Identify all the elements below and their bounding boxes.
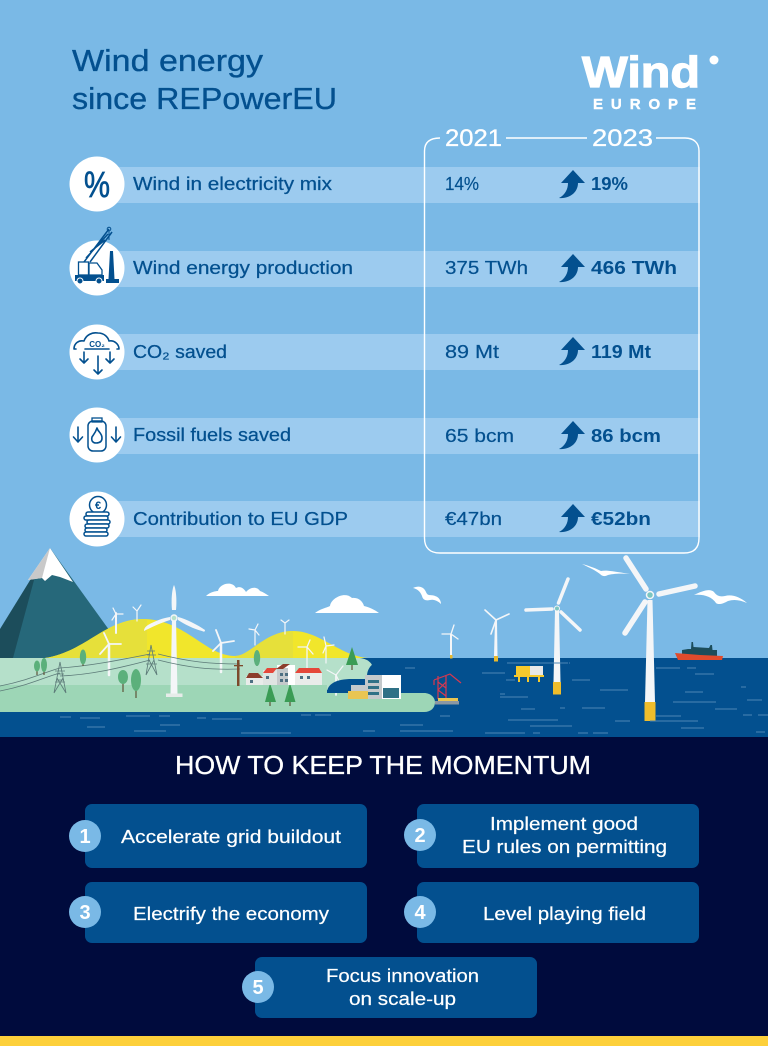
row: Contribution to EU GDP: Contribution to EU GDP <box>133 509 348 529</box>
sea ripples <box>60 663 768 733</box>
icon: gas cylinder with flame and arrows <box>74 418 120 451</box>
row: Fossil fuels saved: Fossil fuels saved <box>133 425 291 445</box>
action 3: 3 <box>79 902 91 924</box>
distant offshore turbine 1 <box>442 625 458 658</box>
action 4: 4 <box>414 902 426 924</box>
birds <box>413 564 747 604</box>
row: Wind in electricity mix <box>70 156 628 212</box>
row: Wind in electricity mix: 14% <box>445 174 479 194</box>
action 5: 5 <box>252 977 264 999</box>
row: Wind energy production <box>70 227 677 296</box>
icon: cloud with CO2 and down arrows <box>74 333 119 374</box>
action 2: 2 <box>414 825 426 847</box>
sea <box>0 658 768 737</box>
row: CO2 saved: 89 Mt <box>445 342 499 362</box>
heading: HOW TO KEEP THE MOMENTUM <box>175 750 591 780</box>
row: Wind in electricity mix: Wind in electricity mix <box>133 174 332 194</box>
action 5: Focus innovation <box>326 966 479 986</box>
action 3: Electrify the economy <box>133 904 329 924</box>
row: Contribution to EU GDP: €47bn <box>445 509 502 529</box>
action 5: on scale-up <box>349 989 456 1009</box>
illustration: landscape with wind turbines <box>0 548 768 737</box>
offshore turbine 3 <box>526 579 580 694</box>
action 1 <box>69 804 367 868</box>
action 5 <box>242 957 537 1018</box>
action 4 <box>404 882 699 943</box>
mountain <box>0 548 125 658</box>
trees <box>34 647 358 706</box>
action 4: Level playing field <box>483 904 646 924</box>
title: since REPowerEU <box>72 81 337 116</box>
title: Wind energy <box>72 43 264 78</box>
panel: data rows <box>70 125 700 553</box>
icon: cloud with CO2 and down arrows: CO₂ <box>89 340 105 349</box>
offshore crane ship <box>434 674 461 704</box>
comparison frame with year headers: 2021 <box>445 125 502 152</box>
logo: WindEurope <box>582 48 718 113</box>
icon: euro coin and stack <box>84 496 110 536</box>
action 2: EU rules on permitting <box>462 837 667 857</box>
row: CO2 saved: CO₂ saved <box>133 342 227 362</box>
action 2: Implement good <box>490 814 638 834</box>
title <box>72 43 337 116</box>
icon: euro coin and stack: € <box>95 500 101 512</box>
action 2 <box>404 804 699 868</box>
red ship <box>675 642 723 660</box>
row: Fossil fuels saved: 86 bcm <box>591 426 661 446</box>
row: Wind energy production: 375 TWh <box>445 258 528 278</box>
action 1: 1 <box>79 826 91 848</box>
row band: production <box>95 251 700 287</box>
hills <box>45 619 368 658</box>
row band: electricity mix <box>95 167 700 203</box>
row: CO2 saved <box>70 324 651 380</box>
row: Wind energy production: 466 TWh <box>591 258 677 278</box>
comparison frame with year headers <box>424 125 699 553</box>
row: Wind in electricity mix: % <box>84 164 110 205</box>
footer bar <box>0 1036 768 1046</box>
village houses <box>246 664 322 685</box>
row: Wind energy production: Wind energy production <box>133 258 353 278</box>
offshore turbine 4 <box>625 558 695 721</box>
row band: CO2 <box>95 334 700 370</box>
main land turbine <box>144 585 205 697</box>
land <box>0 658 435 712</box>
distant offshore turbine 2 <box>485 610 509 662</box>
logo: WindEurope: Wind <box>582 48 700 97</box>
row band: fossil fuels <box>95 418 700 454</box>
panel: how to keep the momentum <box>0 737 768 1036</box>
action 3 <box>69 882 367 943</box>
utility pole <box>234 660 243 686</box>
row: Fossil fuels saved: 65 bcm <box>445 426 514 446</box>
row: CO2 saved: 119 Mt <box>591 342 651 362</box>
row: Wind in electricity mix: 19% <box>591 174 628 194</box>
comparison frame with year headers: 2023 <box>592 125 653 152</box>
factory building <box>327 658 401 699</box>
offshore platform <box>514 666 544 682</box>
logo: WindEurope: EUROPE <box>593 96 696 113</box>
row: Fossil fuels saved <box>70 408 661 462</box>
action 1: Accelerate grid buildout <box>121 827 341 847</box>
row: Contribution to EU GDP: €52bn <box>591 509 651 529</box>
icon: crane truck and tower <box>75 227 119 284</box>
pylons and power lines <box>0 645 240 693</box>
row band: GDP <box>95 501 700 537</box>
row: Contribution to EU GDP <box>70 492 651 546</box>
clouds <box>206 584 379 613</box>
background land turbines <box>100 605 343 695</box>
